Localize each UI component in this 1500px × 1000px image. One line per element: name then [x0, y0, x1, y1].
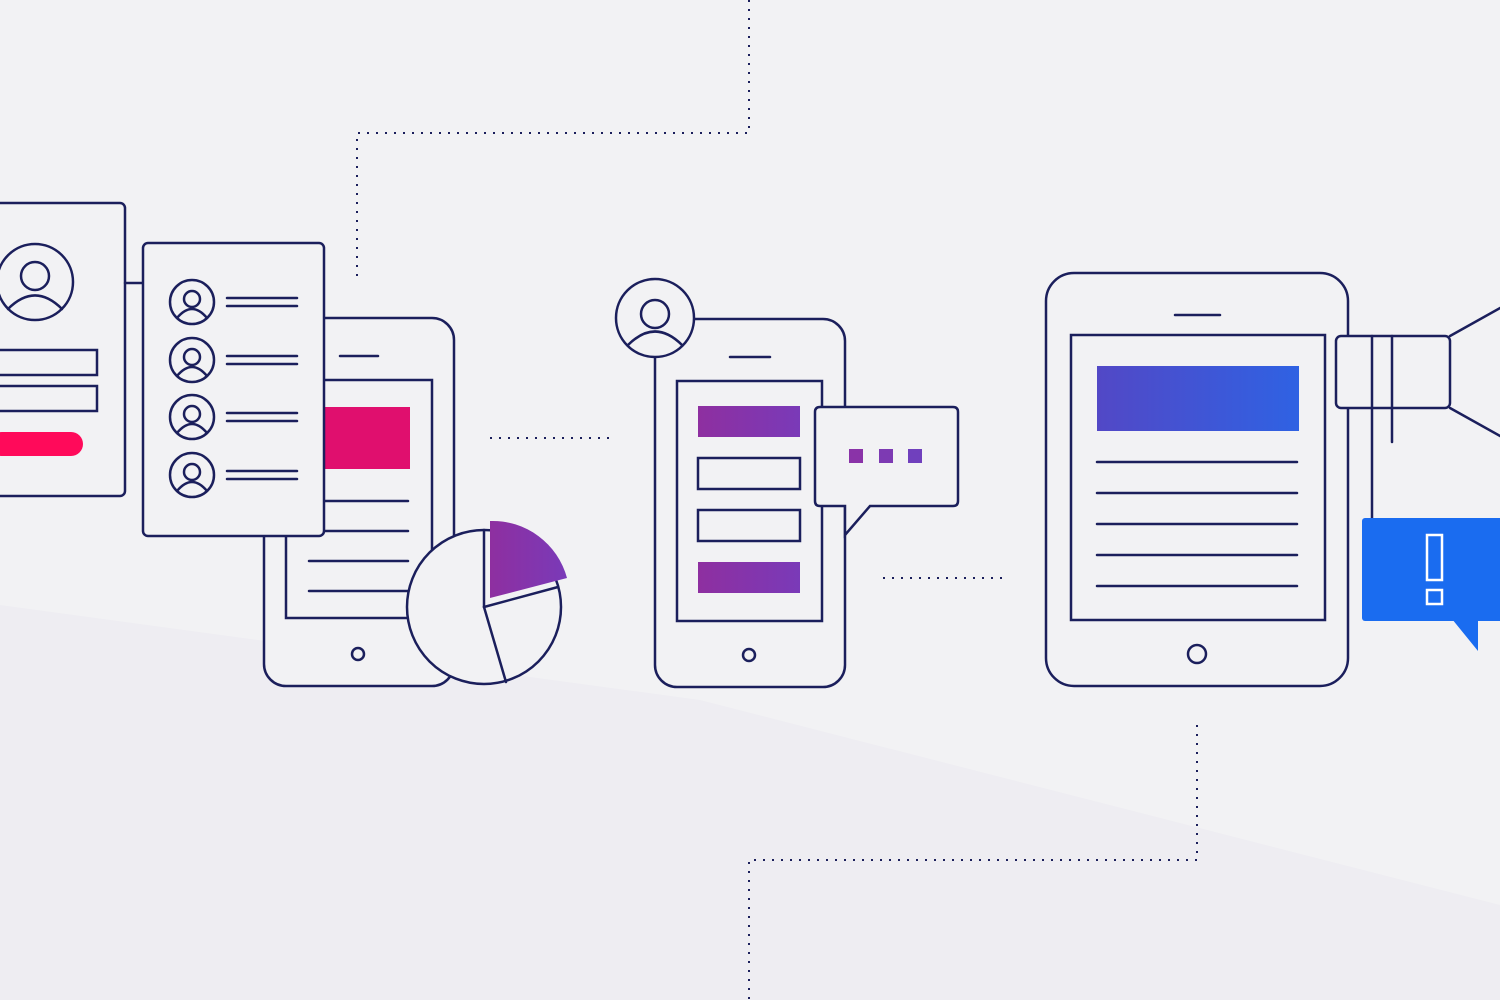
- pie chart: [407, 521, 567, 684]
- phone 1: [264, 318, 454, 686]
- phone 2: [616, 279, 845, 687]
- chat bubble: [815, 407, 958, 535]
- tablet: [1046, 273, 1348, 686]
- contact list card: [143, 243, 324, 536]
- login card: [0, 203, 143, 496]
- alert bubble: [1362, 518, 1500, 651]
- megaphone: [1336, 307, 1500, 518]
